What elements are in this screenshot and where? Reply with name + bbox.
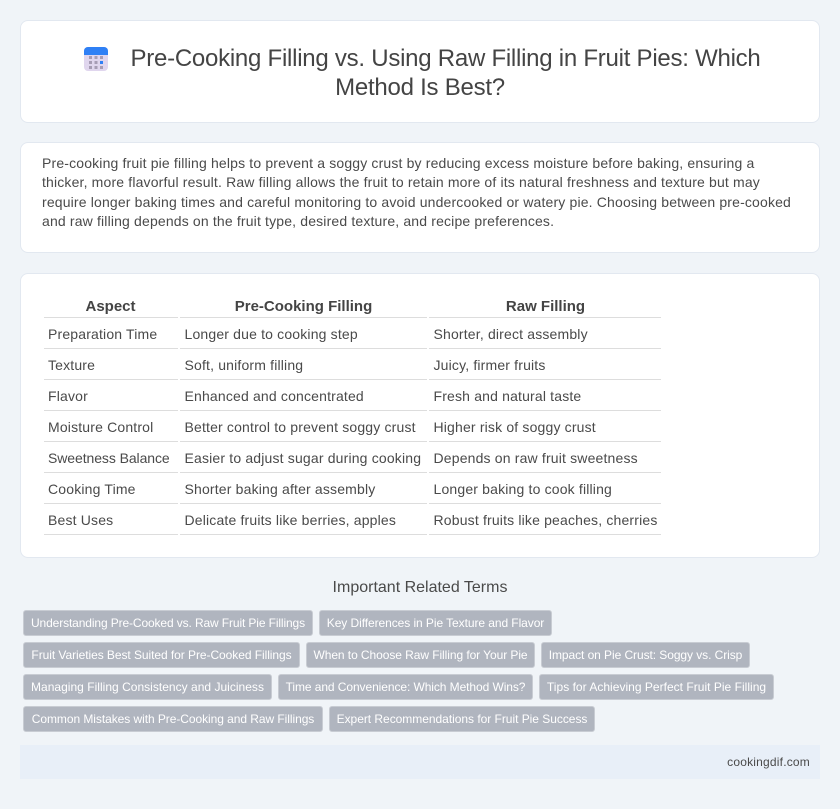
row: sweetness balance: Depends on raw fruit sweetness bbox=[434, 450, 638, 466]
row: sweetness balance: Sweetness Balance bbox=[48, 450, 170, 466]
related term tags: Impact on Pie Crust: Soggy vs. Crisp bbox=[549, 648, 742, 662]
title: Pre-Cooking Filling vs. Using Raw Filling in Fruit Pies: Which bbox=[130, 45, 761, 72]
row: texture: Soft, uniform filling bbox=[184, 357, 303, 373]
row: preparation time: Shorter, direct assembly bbox=[434, 326, 588, 342]
icon: calendar bbox=[84, 47, 108, 71]
panel: comparison table bbox=[20, 273, 820, 558]
row: best uses: Robust fruits like peaches, cherries bbox=[434, 512, 658, 528]
related term tags: Tips for Achieving Perfect Fruit Pie Filling bbox=[547, 680, 766, 694]
row: moisture control bbox=[48, 419, 596, 435]
related term tags: When to Choose Raw Filling for Your Pie bbox=[313, 648, 528, 662]
description text: require longer baking times and careful monitoring to avoid undercooked or watery pie. Choosing between pre-cooked bbox=[42, 194, 791, 210]
description text bbox=[42, 154, 791, 229]
row: moisture control: Higher risk of soggy crust bbox=[434, 419, 596, 435]
row: flavor: Fresh and natural taste bbox=[434, 388, 581, 404]
row: best uses bbox=[48, 512, 658, 528]
description text: thicker, more flavorful result. Raw filling allows the fruit to retain more of its natural freshness and texture but may bbox=[42, 174, 760, 190]
row: texture: Texture bbox=[48, 357, 95, 373]
related term tags: Common Mistakes with Pre-Cooking and Raw Fillings bbox=[32, 712, 314, 726]
row: moisture control: Better control to prevent soggy crust bbox=[184, 419, 416, 435]
row: sweetness balance: Easier to adjust sugar during cooking bbox=[184, 450, 421, 466]
row: preparation time: Preparation Time bbox=[48, 326, 157, 342]
related term tags: Expert Recommendations for Fruit Pie Success bbox=[337, 712, 587, 726]
row: sweetness balance bbox=[48, 450, 638, 466]
row: texture: Juicy, firmer fruits bbox=[434, 357, 546, 373]
panel: description bbox=[20, 142, 820, 253]
row: cooking time: Shorter baking after assembly bbox=[184, 481, 375, 497]
title bbox=[130, 45, 761, 101]
related term tags: Time and Convenience: Which Method Wins? bbox=[286, 680, 525, 694]
table header: Aspect bbox=[85, 298, 136, 315]
row: flavor: Enhanced and concentrated bbox=[184, 388, 364, 404]
panel: title header bbox=[20, 20, 820, 123]
row: moisture control: Moisture Control bbox=[48, 419, 153, 435]
footer source text: cookingdif.com bbox=[727, 755, 810, 769]
footer bar bbox=[20, 745, 820, 779]
row: best uses: Delicate fruits like berries, apples bbox=[184, 512, 396, 528]
table header: Raw Filling bbox=[506, 298, 585, 315]
related term tags: Fruit Varieties Best Suited for Pre-Cooked Fillings bbox=[31, 648, 292, 662]
description text: Pre-cooking fruit pie filling helps to prevent a soggy crust by reducing excess moisture before baking, ensuring a bbox=[42, 154, 754, 170]
row: cooking time: Cooking Time bbox=[48, 481, 136, 497]
description text: and raw filling depends on the fruit type, desired texture, and recipe preferences. bbox=[42, 213, 554, 229]
table header bbox=[85, 298, 585, 315]
row: texture bbox=[48, 357, 546, 373]
row: cooking time: Longer baking to cook filling bbox=[434, 481, 612, 497]
related terms heading: Important Related Terms bbox=[333, 579, 507, 596]
related term tags: Understanding Pre-Cooked vs. Raw Fruit Pie Fillings bbox=[31, 616, 305, 630]
related term tags: Key Differences in Pie Texture and Flavor bbox=[327, 616, 544, 630]
row: best uses: Best Uses bbox=[48, 512, 113, 528]
table header: Pre-Cooking Filling bbox=[235, 298, 372, 315]
related term tags bbox=[23, 610, 774, 732]
row: preparation time bbox=[48, 326, 588, 342]
row: flavor bbox=[48, 388, 581, 404]
row: flavor: Flavor bbox=[48, 388, 88, 404]
row: preparation time: Longer due to cooking step bbox=[184, 326, 358, 342]
title: Method Is Best? bbox=[335, 74, 505, 101]
related term tags: Managing Filling Consistency and Juiciness bbox=[31, 680, 264, 694]
row: cooking time bbox=[48, 481, 612, 497]
